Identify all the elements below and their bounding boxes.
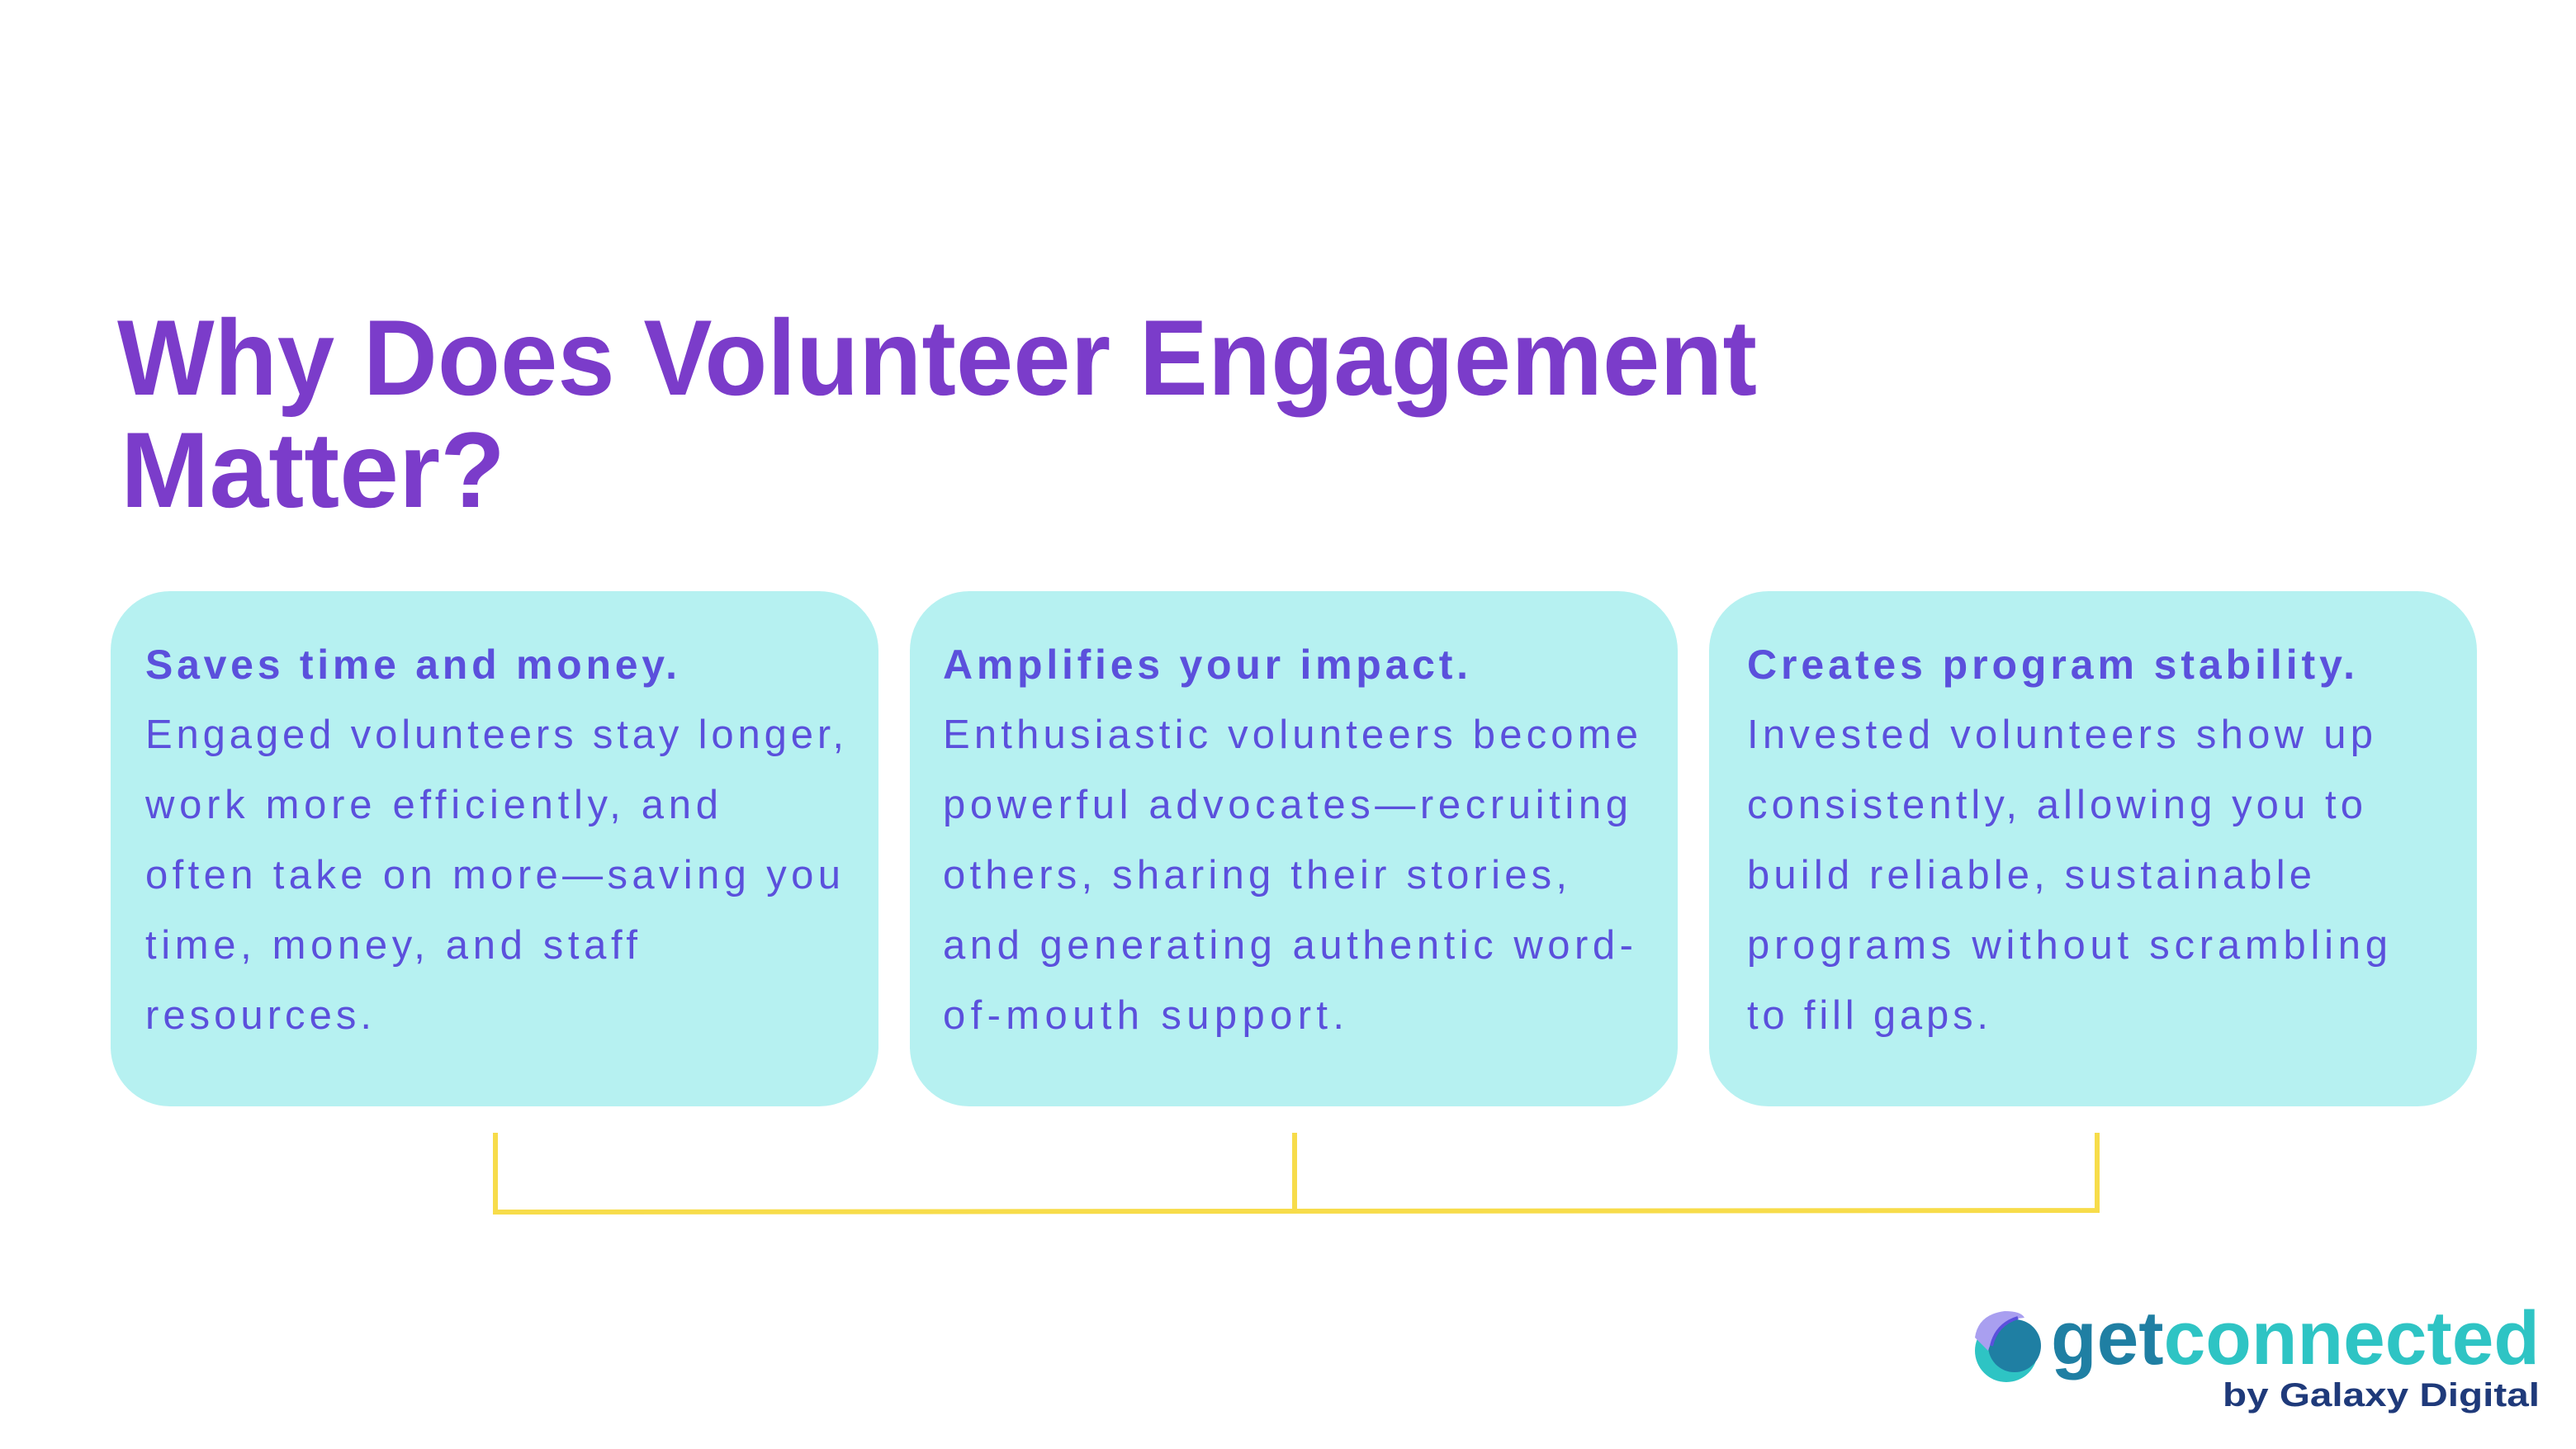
title [117, 297, 1757, 530]
logo [1975, 1296, 2540, 1413]
card body 1: resources. [145, 993, 372, 1038]
card body 1 [144, 713, 844, 1038]
card heading 2: Amplifies your impact. [943, 642, 1468, 688]
bracket connector [495, 1133, 2097, 1212]
panel: amplifies your impact [910, 591, 1678, 1106]
card heading 3: Creates program stability. [1747, 642, 2355, 688]
card body 2 [943, 713, 1638, 1038]
card body 3 [1747, 713, 2388, 1038]
logo tagline: by Galaxy Digital [2223, 1377, 2540, 1413]
title: Why Does Volunteer Engagement [117, 297, 1757, 418]
card body 3: to fill gaps. [1747, 993, 1988, 1038]
card body 3: programs without scrambling [1747, 923, 2388, 968]
card body 3: consistently, allowing you to [1747, 783, 2363, 827]
title: Matter? [121, 410, 505, 530]
card body 2: and generating authentic word- [943, 923, 1633, 968]
card body 2: others, sharing their stories, [943, 853, 1567, 897]
card heading 1: Saves time and money. [145, 642, 677, 688]
card body 1: Engaged volunteers stay longer, [145, 713, 844, 757]
panel: saves time and money [111, 591, 878, 1106]
panel: creates program stability [1709, 591, 2477, 1106]
card body 2: powerful advocates—recruiting [943, 783, 1628, 827]
icon: logo mark [1975, 1311, 2041, 1382]
card body 1: time, money, and staff [145, 923, 637, 968]
logo wordmark: getconnected [2051, 1296, 2540, 1380]
card body 2: Enthusiastic volunteers become [943, 713, 1638, 757]
card body 3: Invested volunteers show up [1747, 713, 2373, 757]
card body 1: work more efficiently, and [144, 783, 718, 827]
card body 1: often take on more—saving you [145, 853, 841, 897]
card body 3: build reliable, sustainable [1747, 853, 2312, 897]
card body 2: of-mouth support. [943, 993, 1344, 1038]
